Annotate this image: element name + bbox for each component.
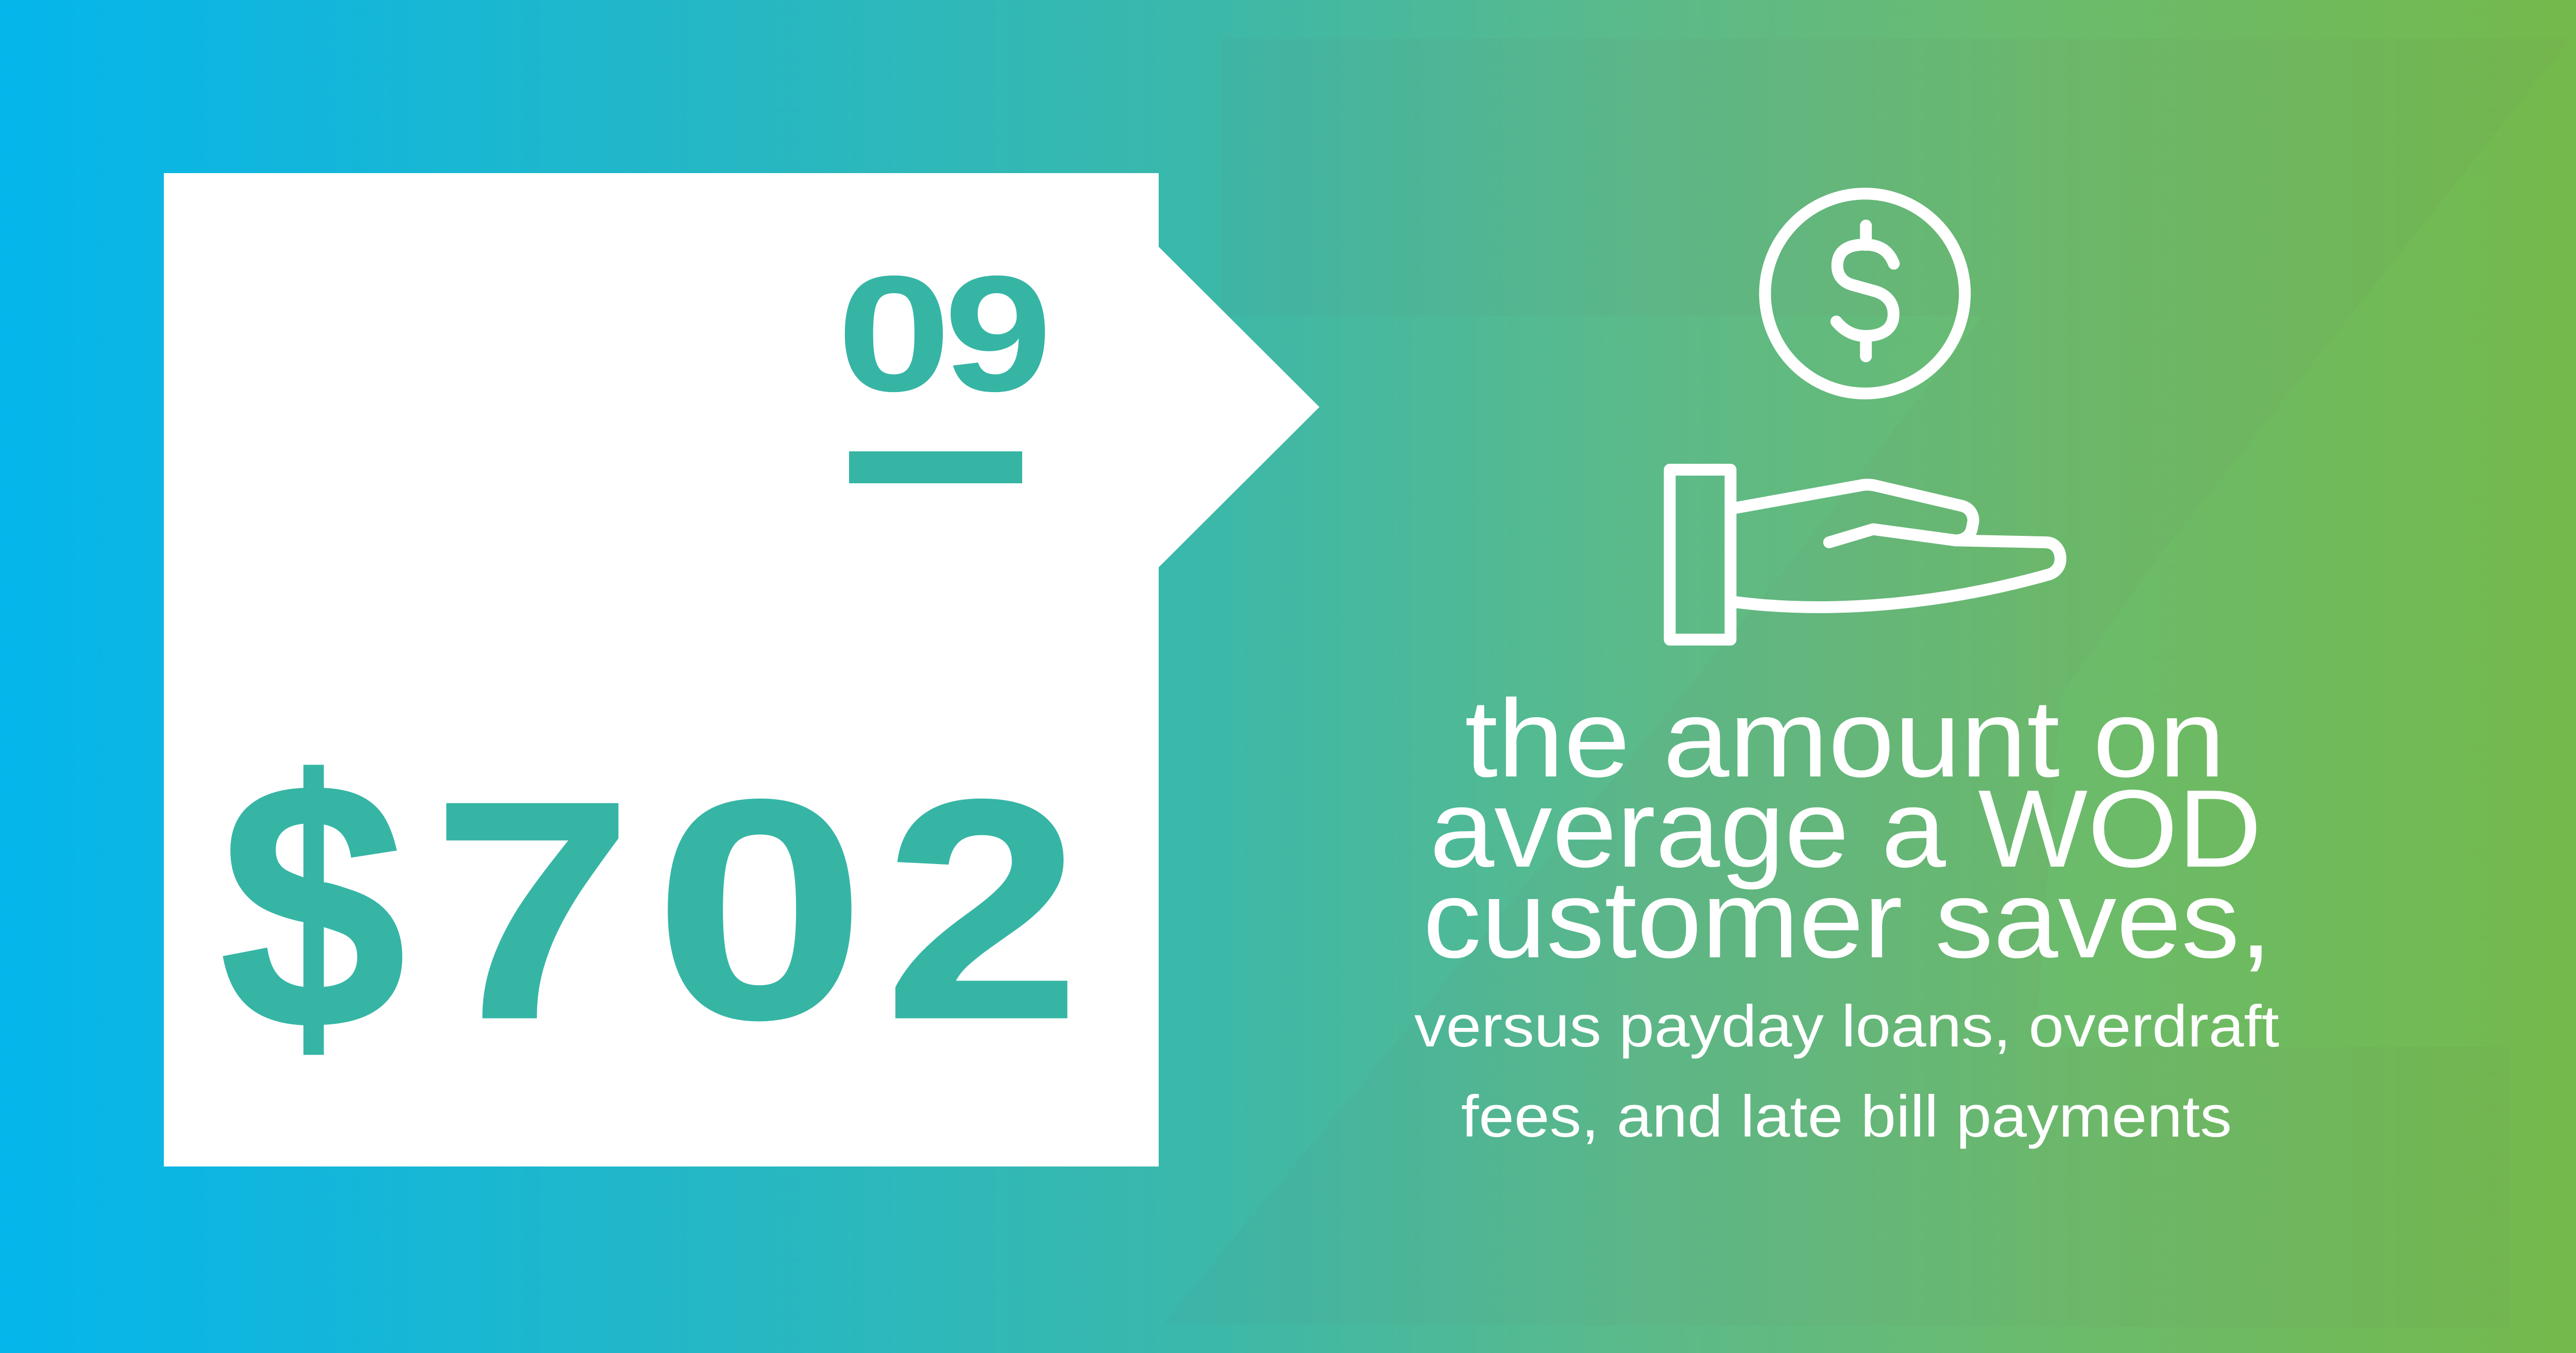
large statement: the amount on	[1465, 677, 2225, 800]
icon: coin	[1765, 194, 1965, 394]
supporting text	[1414, 994, 2279, 1149]
callout shape	[164, 173, 1319, 1166]
number 09: 9	[944, 242, 1052, 426]
supporting text: versus payday loans, overdraft	[1414, 994, 2279, 1059]
icon: hand holding dollar coin	[1670, 194, 2060, 639]
large statement: customer saves,	[1423, 858, 2272, 981]
headline figure $702: 2	[885, 735, 1080, 1083]
number 09	[837, 241, 1052, 426]
large statement: average a WOD	[1430, 767, 2262, 890]
divider bar	[849, 451, 1022, 483]
number 09: 0	[837, 241, 951, 426]
headline figure $702	[220, 709, 1080, 1103]
headline figure $702: $	[220, 709, 405, 1103]
supporting text: fees, and late bill payments	[1461, 1084, 2232, 1149]
headline figure $702: 0	[654, 735, 866, 1083]
panel: white arrow callout	[164, 173, 1319, 1166]
text block: description	[1414, 677, 2279, 1149]
headline figure $702: 7	[432, 738, 633, 1083]
background tonal shapes	[1163, 39, 2571, 1328]
icon: hand and cuff	[1670, 470, 2060, 639]
large statement	[1423, 677, 2272, 981]
